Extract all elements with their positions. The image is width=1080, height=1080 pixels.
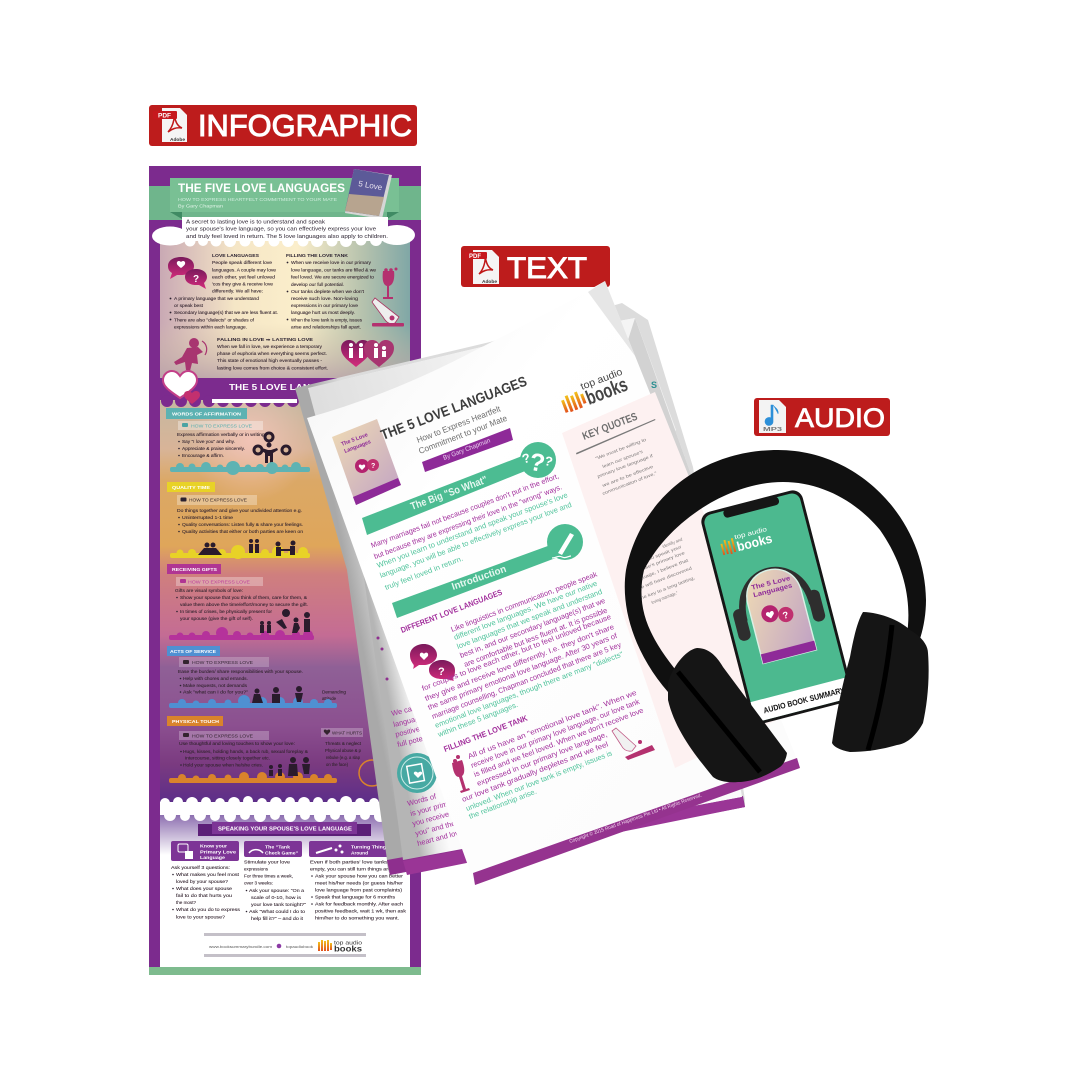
text: column 1: What does your spouse	[176, 886, 233, 891]
intro text: and truly feel loved in return. The 5 love languages also apply to children.	[186, 234, 388, 240]
back sheet text: positive	[394, 724, 421, 739]
text: love languages: or speak best	[174, 303, 204, 308]
text: filling the love tank: When the love tank is empty, issues	[291, 318, 362, 322]
box: know your primary love language: Language	[200, 855, 226, 860]
author ribbon: By Gary Chapman	[442, 437, 492, 462]
author: By Gary Chapman	[178, 204, 224, 208]
text: different love languages: they give and receive love differently. I.e. they don't share	[423, 622, 615, 703]
text: column 3: positive feedback, wait 1 wk, then ask	[315, 908, 407, 914]
text: filling the love tank: love language, our tanks are filled & we	[291, 268, 377, 272]
text: column 2: your love tank tonight?"	[251, 902, 307, 907]
text: filling the love tank: When we receive love in our primary	[291, 260, 372, 265]
text	[177, 432, 266, 458]
quote 1: "We must be willing to	[595, 437, 647, 461]
text: Ease the burden/ share responsibilities with your spouse.	[178, 669, 303, 674]
section: quality time	[167, 482, 310, 559]
box: know your primary love language	[171, 841, 239, 861]
icon: family silhouettes	[269, 757, 310, 776]
box: turning things around: Around	[351, 850, 368, 856]
screen logo: books	[735, 531, 774, 554]
back sheet 1	[295, 303, 745, 875]
text: Quality activities that either or both parties are keen on	[182, 529, 304, 534]
author ribbon	[422, 428, 513, 472]
text: different love languages: marriage counselling, Chapman concluded that there are 5 key	[430, 640, 623, 721]
icon: pdf: Adobe	[482, 279, 498, 284]
text: column 1: What do you do to express	[176, 907, 240, 912]
cover thumbnail: Languages	[344, 439, 372, 455]
cloud: top intro	[152, 217, 415, 247]
fold shading	[588, 281, 635, 356]
back sheet icon	[397, 753, 437, 793]
cloud	[169, 695, 337, 708]
screen logo: top audio	[734, 526, 768, 541]
notch	[723, 496, 780, 518]
tag: ACTS OF SERVICE	[170, 649, 216, 654]
text: filling the love tank: feel loved. We are secure energized to	[291, 274, 375, 280]
back sheet text: S	[651, 380, 657, 390]
cloud	[169, 627, 314, 640]
footer: www.booksummarybundle.com	[209, 945, 272, 949]
key quotes panel	[562, 392, 785, 768]
banner: text	[461, 246, 610, 287]
quote 1: learn our spouse's	[602, 449, 644, 469]
headphones and cover illustration	[724, 559, 833, 668]
how to tag: HOW TO EXPRESS LOVE	[191, 424, 252, 428]
cloud	[169, 772, 337, 783]
icon: speech bubbles	[168, 257, 207, 289]
heading: falling in love to lasting love: FALLING IN LOVE ➡ LASTING LOVE	[217, 337, 313, 342]
how to tag: HOW TO EXPRESS LOVE	[188, 580, 250, 584]
screen logo	[719, 525, 774, 558]
footer band	[473, 758, 800, 885]
how to tag: HOW TO EXPRESS LOVE	[192, 660, 253, 665]
footer: topaudiobook	[286, 945, 313, 949]
text: column 3: meet his/her needs (or guess his/her	[315, 880, 404, 886]
text: column 3	[310, 860, 407, 920]
footer band: Copyright © 2015 Road of Happiness Pte Ltd • All Rights Reserved.	[568, 792, 703, 845]
heading: filling the love tank: FILLING THE LOVE TANK	[442, 713, 529, 754]
icon: tipped bottle	[612, 728, 655, 760]
how to tag	[176, 577, 263, 586]
text: Uninterrupted 1-1 time	[182, 515, 234, 520]
quote 1: communication of love."	[602, 470, 658, 496]
text: falling in love: When we fall in love, we experience a temporary	[217, 344, 323, 349]
infographic background	[149, 166, 421, 975]
text: different love languages: the same primary emotional love language. After 30 years of	[426, 631, 619, 712]
tag	[167, 716, 223, 726]
intro text: your spouse's love language, so you can effectively express your love	[186, 226, 376, 232]
quote 2: identify and	[662, 537, 683, 549]
green band	[149, 186, 421, 220]
title ribbon	[170, 178, 399, 219]
tag	[167, 482, 215, 492]
logo: top audio	[334, 940, 362, 946]
subtitle: How to Express Heartfelt	[415, 403, 502, 445]
box: know your primary love language: Know your	[200, 844, 227, 848]
icon: helping silhouettes	[252, 686, 303, 703]
band: the 5 love languages	[149, 378, 421, 407]
heading ribbon: speaking	[198, 822, 371, 836]
text: In times of crises, be physically present for	[180, 609, 273, 614]
how to tag	[177, 495, 257, 505]
right ear cup	[832, 612, 929, 752]
icon: heart on band	[163, 371, 200, 404]
text: Appreciate & praise sincerely.	[182, 446, 245, 451]
quote 1	[595, 437, 658, 496]
text: on the face)	[326, 762, 349, 767]
text: filling the love tank: All of us have an "emotional love tank". When we	[466, 688, 638, 761]
text: Say "I love you" and why.	[182, 439, 235, 444]
box: tank check game	[244, 841, 302, 857]
footer	[204, 933, 366, 957]
text: filling the love tank: the relationship arise.	[467, 787, 538, 821]
text: column 2: Ask "What could I do to	[249, 909, 306, 914]
text: column 2: help fill it?" – and do it	[251, 916, 304, 921]
text: filling the love tank: is filled and we feel loved. When we don't receive love	[472, 706, 645, 779]
box: turning things around: Turning Things	[351, 844, 390, 850]
logo: top audio books: top audio	[579, 367, 625, 393]
cover thumbnail: ?	[371, 463, 375, 470]
document: back sheets	[295, 303, 745, 875]
banner: infographic: INFOGRAPHIC	[198, 109, 412, 143]
back sheet text: is your primary	[409, 797, 459, 818]
text: filling the love tank: receive love in our primary love language, our love tank	[469, 697, 641, 770]
box: tank check game: The "Tank	[265, 844, 291, 850]
box: know your primary love language: Primary Love	[200, 850, 237, 854]
text: Quality conversations: Listen fully & share your feelings.	[182, 522, 303, 527]
text: big so what: Many marriages fail not because couples don't put in the effort,	[370, 471, 560, 550]
text: column 2: expressions	[244, 866, 268, 872]
cover thumbnail	[332, 419, 401, 505]
box: tank check game: Check Game"	[265, 850, 298, 856]
section: physical touch	[167, 716, 385, 786]
text: column 3: Even if both parties' love tanks are	[310, 860, 399, 864]
tag	[167, 564, 221, 574]
icon: person with bubbles	[252, 432, 292, 463]
text: Help with chores and errands.	[183, 676, 248, 681]
text: love languages: People speak different love	[212, 260, 273, 265]
text: column 2: Ask your spouse: "On a	[249, 888, 305, 893]
page sheet	[307, 281, 800, 885]
text	[178, 669, 347, 701]
text: filling the love tank: expressions in our primary love	[291, 303, 359, 308]
text	[179, 741, 362, 768]
text: filling the love tank: language hurt us most deeply.	[291, 310, 355, 315]
text: column 3: love language from past complaints)	[315, 888, 403, 892]
summary band	[751, 677, 851, 722]
text: falling in love	[217, 344, 328, 370]
key quotes: KEY QUOTES	[581, 411, 639, 443]
tag: WORDS OF AFFIRMATION	[172, 412, 241, 416]
text: Physical abuse & p	[325, 748, 362, 753]
text: filling the love tank: expressed in our primary love language,	[475, 730, 608, 788]
title: THE 5 LOVE LANGUAGES	[379, 374, 529, 444]
text: column 1: the most?	[176, 900, 197, 905]
quote 2: loving marriage."	[651, 590, 679, 605]
how to tag: HOW TO EXPRESS LOVE	[192, 734, 253, 738]
text: filling the love tank: Our tanks deplete when we don't	[291, 289, 365, 294]
text: attitude	[322, 696, 337, 701]
heading: the 5 love languages: THE 5 LOVE LANGUAGES	[229, 382, 353, 392]
text: Hugs, kisses, holding hands, a back rub, sexual foreplay &	[183, 749, 308, 754]
headphones and cover illustration: ?	[782, 610, 790, 622]
tag: QUALITY TIME	[172, 485, 210, 490]
text: love languages: differently. We all have:	[212, 288, 263, 294]
document: front page	[307, 281, 800, 885]
icon: pdf: PDF	[469, 254, 481, 260]
intro text: A secret to lasting love is to understand and speak	[186, 220, 325, 226]
phone screen	[703, 492, 851, 722]
what hurts tag: WHAT HURTS	[332, 730, 362, 736]
icon: pdf: PDF	[158, 112, 171, 120]
text: column 1	[171, 865, 240, 920]
ribbon: introduction: Introduction	[450, 564, 508, 593]
back sheet text: We can	[390, 703, 417, 718]
back sheet text: you" and the	[414, 819, 456, 838]
box: turning things around	[309, 841, 399, 857]
phone body	[699, 488, 855, 726]
text: Express affirmation verbally or in writing:	[177, 432, 266, 437]
book cover	[345, 169, 392, 219]
logo: books	[334, 944, 362, 954]
tag	[166, 408, 247, 419]
text: column 2: over 3 weeks:	[244, 880, 273, 886]
text: column 3: empty, you can still turn things around	[310, 866, 401, 872]
text: different love languages: for couples to love each other, but to feel unloved because	[420, 612, 612, 693]
icon: pdf	[153, 108, 187, 142]
text: Demanding	[322, 690, 347, 694]
green footer strip	[149, 967, 421, 975]
panel: love languages background	[160, 238, 410, 380]
text: different love languages: are comfortable but less fluent at. It is possible	[462, 606, 609, 669]
text: column 2: For three times a week,	[244, 874, 293, 878]
text: rebuke (e.g. a slap	[326, 755, 361, 760]
text: love languages	[170, 260, 278, 330]
how to tag: HOW TO EXPRESS LOVE	[189, 498, 247, 502]
text: love languages: expressions within each language.	[174, 324, 247, 330]
text: big so what: language, you will be able to effectively express your love and	[379, 500, 573, 580]
text: falling in love: phase of euphoria when everything seems perfect.	[217, 351, 327, 356]
text: Encourage & affirm.	[182, 453, 224, 458]
logo: top audio books: books	[583, 374, 631, 410]
text: your spouse (give the gift of self).	[180, 616, 253, 621]
text: filling the love tank: develop our full potential.	[291, 282, 344, 287]
text: different love languages: emotional love languages, though there are many "dialects"	[433, 649, 625, 730]
text: Ask "what can I do for you?"	[183, 690, 249, 694]
text: column 1: Ask yourself 3 questions:	[171, 865, 230, 870]
text: love languages: There are also "dialects" or shades of	[174, 318, 255, 322]
icon: tipped bottle	[372, 298, 404, 326]
text	[175, 588, 308, 621]
heading ribbon: speaking: SPEAKING YOUR SPOUSE'S LOVE LANGUAGE	[218, 826, 352, 832]
text: different love languages: best in, and our secondary language(s) that we	[458, 596, 606, 660]
text: Show your spouse that you think of them, care for them, &	[180, 595, 307, 600]
text: filling the love tank: unloved. When our love tank is empty, issues is	[464, 748, 614, 813]
icon: wine glass	[452, 755, 470, 793]
text	[177, 508, 304, 534]
back sheet text: full potential	[396, 731, 437, 749]
back sheet text: languages	[392, 712, 428, 729]
text: Gifts are visual symbols of love:	[175, 588, 243, 593]
text: love languages: languages. A couple may love	[212, 268, 277, 272]
heading: filling the love tank: FILLING THE LOVE TANK	[286, 253, 349, 258]
text: love languages: Secondary language(s) that we are less fluent at.	[174, 310, 278, 315]
icon: speech bubbles: ?	[193, 274, 199, 285]
cloud: bottom divider	[160, 796, 410, 815]
text: column 2	[244, 860, 307, 921]
panel: sections background	[160, 378, 410, 805]
text: value them above the time/effort/money to secure the gift.	[180, 602, 308, 607]
text: column 1: fail to do that hurts you	[176, 893, 232, 898]
headphones	[625, 450, 929, 782]
icon: orange circle	[359, 760, 385, 786]
back sheet text: you receive	[411, 809, 450, 828]
title: THE FIVE LOVE LANGUAGES	[178, 183, 345, 195]
text: love languages: each other, yet feel unloved	[212, 274, 276, 280]
summary band: AUDIO BOOK SUMMARY	[763, 685, 846, 715]
ribbon: the big so what: ?	[543, 453, 554, 469]
section: receiving gifts	[167, 564, 314, 640]
text: big so what: but because they are expressing their love in the "wrong" ways.	[373, 482, 563, 561]
how to tag	[179, 657, 269, 667]
icon: pdf	[465, 250, 499, 284]
section: acts of service	[167, 646, 347, 708]
tag	[167, 646, 220, 656]
quote 2	[637, 537, 695, 605]
ribbon: the big so what: ?	[527, 448, 547, 478]
banner: audio: AUDIO	[795, 403, 885, 433]
subtitle: Commitment to your Mate	[417, 413, 509, 456]
icon: couples silhouettes	[198, 539, 296, 556]
back sheet text: Words of	[406, 791, 438, 808]
tag: PHYSICAL TOUCH	[172, 719, 219, 724]
text: filling the love tank	[287, 260, 377, 330]
text: love languages: A primary language that we understand	[174, 296, 260, 301]
book cover: 5 Love	[358, 179, 383, 192]
quote 2: use's primary love	[642, 550, 686, 571]
text: column 1: What makes you feel most	[176, 872, 240, 877]
text: intercourse, sitting closely together etc.	[185, 756, 270, 760]
text: Threats & neglect	[325, 741, 362, 746]
icon: cupid	[174, 338, 207, 371]
panel: speaking your spouse's love language	[160, 809, 410, 967]
text: different love languages: different love languages. We have our native	[452, 579, 599, 642]
quote 2: we will have discovered	[637, 565, 693, 591]
banner: text: TEXT	[507, 252, 587, 285]
left ear cup	[668, 648, 787, 782]
ribbon: introduction	[392, 524, 583, 618]
icon: couple hearts	[341, 340, 394, 367]
text: different love languages: within these 5 languages.	[436, 700, 519, 739]
text: big so what: When you learn to understand and speak your spouse's love	[376, 490, 569, 570]
cloud	[170, 545, 310, 559]
tag: RECEIVING GIFTS	[172, 567, 217, 572]
ribbon: the big so what: ?	[520, 450, 532, 467]
text: filling the love tank: our love tank gradually depletes and we feel	[460, 739, 610, 804]
icon: wine glass	[383, 268, 398, 299]
text: falling in love: This state of emotional high eventually passes -	[217, 358, 323, 363]
quote 1: primary love language if	[597, 453, 654, 479]
panel: infographic	[149, 166, 421, 975]
back sheet text	[376, 380, 657, 848]
phone	[699, 488, 855, 726]
headphones and cover illustration: The 5 Love	[751, 575, 791, 592]
text: column 3: him/her to do something you want.	[315, 916, 399, 920]
text: column 3: Ask your spouse how you can better	[315, 874, 404, 878]
logo: top audio books	[560, 367, 631, 414]
text: column 3: Speak that language for 6 months	[315, 894, 395, 900]
heading: different love languages: DIFFERENT LOVE LANGUAGES	[399, 588, 504, 635]
ribbon: the big so what: The Big "So What"	[409, 474, 489, 513]
key quotes	[576, 411, 695, 605]
quote 2: the key to a long lasting,	[639, 575, 695, 601]
text: big so what	[370, 471, 573, 592]
text: love languages: 'cos they give & receive love	[212, 282, 274, 286]
subtitle: HOW TO EXPRESS HEARTFELT COMMITMENT TO YOUR MATE	[178, 197, 337, 202]
text: column 2: scale of 0-10, how is	[251, 895, 301, 900]
quote 1: we are to be effective	[602, 464, 654, 488]
ribbon: the big so what	[362, 442, 556, 535]
back sheet text: heart and love	[416, 827, 464, 848]
text: Make requests, not demands	[183, 683, 247, 688]
heading: love languages: LOVE LANGUAGES	[212, 253, 259, 258]
quote 2: to speak your	[649, 544, 683, 561]
quote 2: guage, I believe that	[639, 557, 690, 581]
how to tag	[178, 421, 263, 430]
text: Do things together and give your undivided attention e.g.	[177, 508, 302, 513]
text: column 1: love to your spouse?	[176, 914, 226, 920]
text: different love languages	[420, 569, 625, 739]
text: filling the love tank: arise and relationships fall apart.	[291, 324, 361, 330]
cover thumbnail: The 5 Love	[341, 432, 369, 448]
how to tag	[179, 731, 269, 740]
icon: speech bubbles: ?	[438, 666, 445, 678]
cloud	[170, 461, 310, 475]
intro text	[186, 220, 388, 240]
icon: speech bubbles	[410, 644, 455, 681]
text: column 1: loved by your spouse?	[176, 879, 229, 884]
text: big so what: truly feel loved in return.	[383, 554, 464, 592]
back sheet 2	[308, 318, 745, 875]
text: column 2: Stimulate your love	[244, 860, 291, 864]
text: filling the love tank	[460, 688, 645, 821]
icon: gift silhouettes	[260, 609, 310, 633]
icon: pdf: Adobe	[170, 137, 186, 142]
banner: audio	[754, 398, 890, 436]
headband	[625, 450, 926, 692]
text: different love languages: Like linguistics in communication, people speak	[449, 569, 599, 634]
text: different love languages: love languages that we speak and understand	[455, 587, 603, 651]
text: Use thoughtful and loving touches to show your love:	[179, 741, 295, 746]
icon: mp3: MP3	[763, 427, 782, 433]
text: filling the love tank: receive such love. Non-loving	[291, 296, 359, 301]
text: Hold your spouse when he/she cries.	[183, 762, 263, 768]
text: falling in love: lasting love comes from choice & consistent effort.	[217, 366, 328, 370]
text: column 3: Ask for feedback monthly. After each	[315, 902, 404, 906]
banner: infographic	[149, 105, 417, 146]
what hurts tag	[321, 728, 363, 737]
headphones and cover illustration: Languages	[753, 582, 793, 599]
logo	[318, 940, 362, 954]
section: words of affirmation	[166, 408, 310, 475]
